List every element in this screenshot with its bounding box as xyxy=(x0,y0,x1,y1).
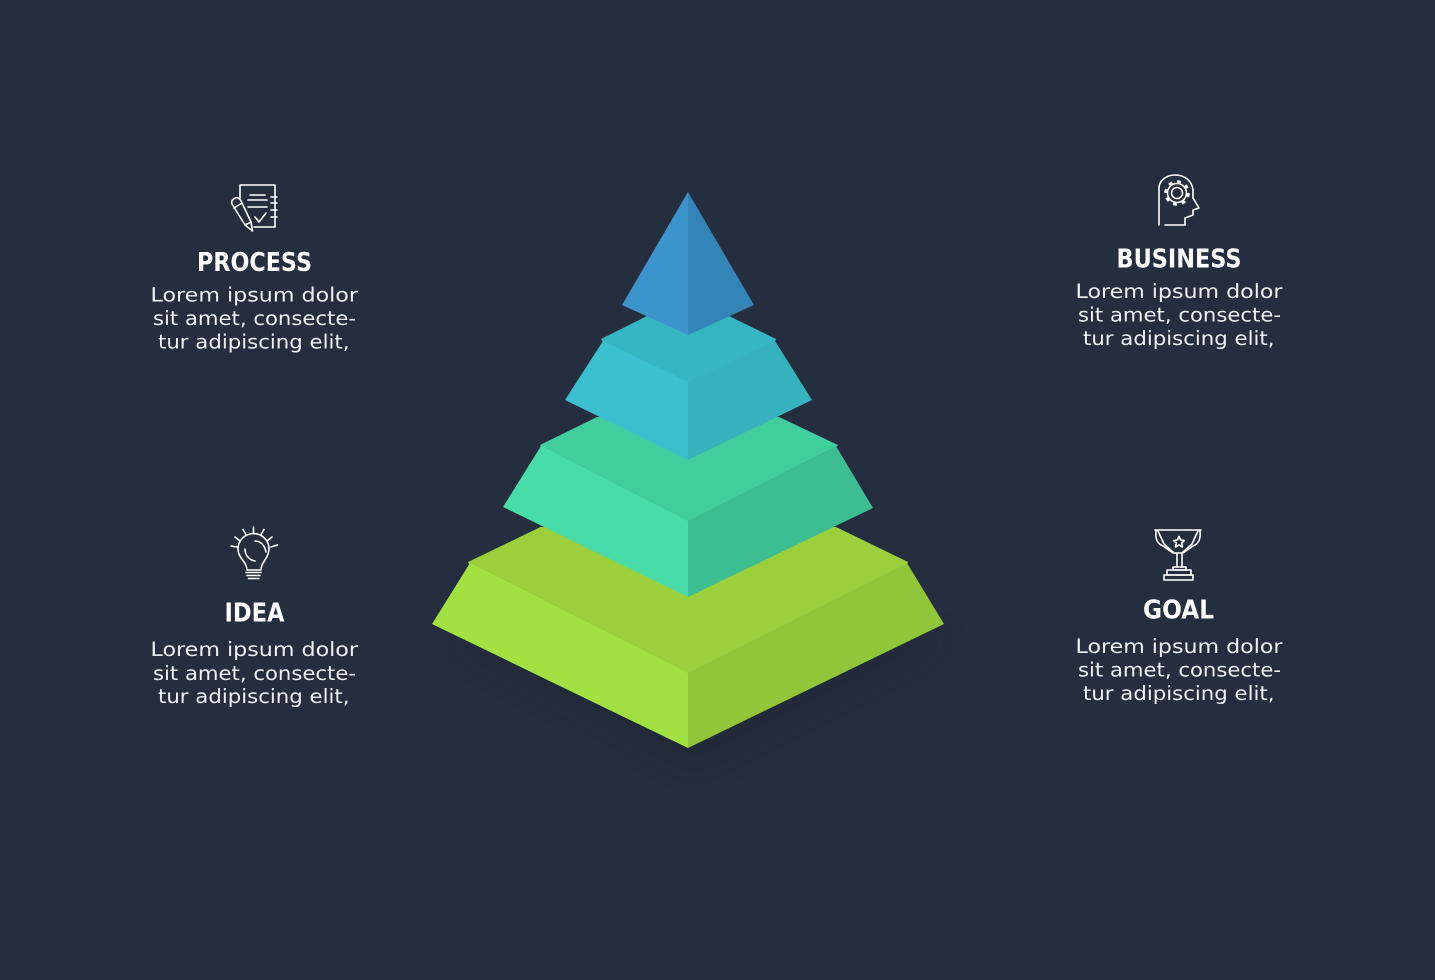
tier 1: blue apex xyxy=(622,192,754,335)
text: process description: tur adipiscing elit, xyxy=(158,330,350,354)
heading: business: BUSINESS xyxy=(1116,244,1242,274)
text: business description: Lorem ipsum dolor xyxy=(1076,280,1284,303)
text: business description: sit amet, consecte- xyxy=(1078,304,1281,326)
heading: process: PROCESS xyxy=(197,248,312,278)
text: business description xyxy=(1076,280,1284,350)
text: goal description xyxy=(1076,635,1284,705)
pyramid chart xyxy=(432,192,950,768)
panel: business xyxy=(1076,175,1284,350)
icon: trophy xyxy=(1155,530,1201,580)
text: idea description: sit amet, consecte- xyxy=(153,662,356,685)
text: goal description: sit amet, consecte- xyxy=(1078,658,1281,682)
text: business description: tur adipiscing elit, xyxy=(1083,327,1274,350)
text: process description: Lorem ipsum dolor xyxy=(150,284,359,306)
text: idea description: tur adipiscing elit, xyxy=(158,685,350,708)
tier 4: lime base xyxy=(432,527,944,748)
heading: goal: GOAL xyxy=(1143,596,1214,626)
text: process description xyxy=(150,284,359,354)
panel: process xyxy=(150,185,359,354)
icon: head with gear xyxy=(1159,175,1199,225)
tier 3: green xyxy=(503,417,873,597)
text: goal description: Lorem ipsum dolor xyxy=(1076,635,1284,658)
text: goal description: tur adipiscing elit, xyxy=(1083,682,1274,705)
text: idea description xyxy=(150,638,359,708)
heading: idea: IDEA xyxy=(224,598,284,628)
text: idea description: Lorem ipsum dolor xyxy=(150,638,359,661)
text: process description: sit amet, consecte- xyxy=(153,307,356,330)
panel: goal xyxy=(1076,530,1284,705)
panel: idea xyxy=(150,527,359,708)
icon: light bulb xyxy=(231,527,278,578)
icon: notebook and pen xyxy=(232,185,277,231)
tier 2: teal xyxy=(565,316,812,460)
